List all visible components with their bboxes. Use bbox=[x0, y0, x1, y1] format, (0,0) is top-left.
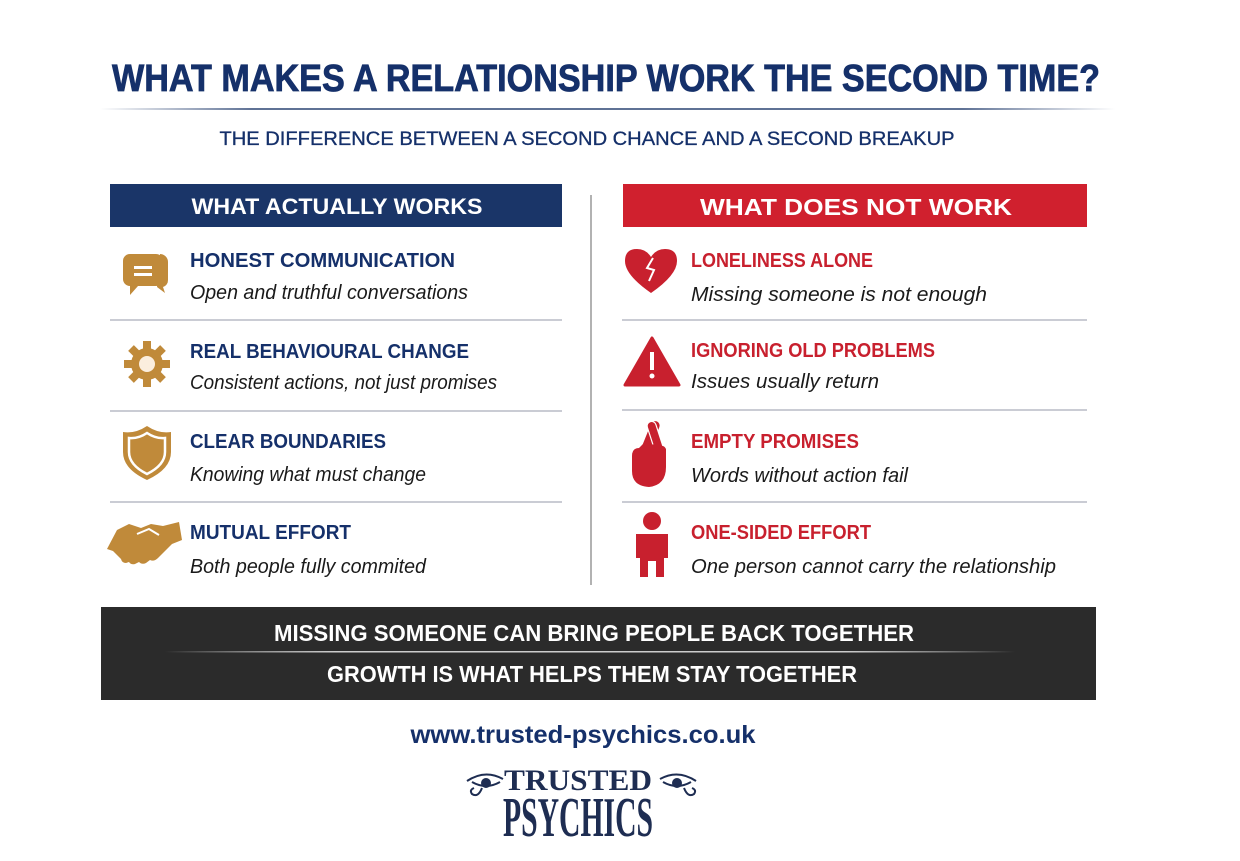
header: works bbox=[110, 184, 562, 227]
header: does not work: WHAT DOES NOT WORK bbox=[700, 194, 1012, 220]
item: behavioural change: REAL BEHAVIOURAL CHANGE bbox=[190, 341, 469, 363]
subtitle: THE DIFFERENCE BETWEEN A SECOND CHANCE AND A SECOND BREAKUP bbox=[220, 129, 954, 150]
item: boundaries: CLEAR BOUNDARIES bbox=[190, 431, 386, 453]
item: ignoring problems bbox=[691, 340, 935, 393]
item: mutual effort bbox=[190, 522, 427, 578]
item: empty promises bbox=[691, 431, 909, 487]
panel: what actually works bbox=[107, 184, 562, 578]
item: one-sided effort: ONE-SIDED EFFORT bbox=[691, 522, 871, 544]
item: one-sided effort: One person cannot carry the relationship bbox=[691, 556, 1056, 578]
title: WHAT MAKES A RELATIONSHIP WORK THE SECOND TIME? bbox=[112, 58, 1100, 100]
item: mutual effort: Both people fully commited bbox=[190, 556, 427, 578]
item: loneliness bbox=[691, 250, 987, 306]
logo: PSYCHICS bbox=[503, 787, 653, 849]
bottom banner: GROWTH IS WHAT HELPS THEM STAY TOGETHER bbox=[327, 661, 857, 687]
item: ignoring problems: Issues usually return bbox=[691, 371, 879, 393]
icon: broken heart bbox=[625, 249, 677, 293]
icon: speech bubble bbox=[123, 254, 168, 295]
item: loneliness: Missing someone is not enough bbox=[691, 284, 987, 306]
item: empty promises: Words without action fail bbox=[691, 465, 909, 487]
icon: eye right bbox=[660, 774, 696, 795]
icon: crossed fingers bbox=[632, 420, 666, 487]
item: one-sided effort bbox=[691, 522, 1056, 578]
item: behavioural change bbox=[190, 341, 497, 394]
icon: person bbox=[636, 512, 668, 577]
item: empty promises: EMPTY PROMISES bbox=[691, 431, 859, 453]
item: ignoring problems: IGNORING OLD PROBLEMS bbox=[691, 340, 935, 362]
item: behavioural change: Consistent actions, not just promises bbox=[190, 372, 497, 394]
item: honest communication: Open and truthful conversations bbox=[190, 282, 468, 304]
item: boundaries: Knowing what must change bbox=[190, 464, 426, 486]
logo: TRUSTED bbox=[504, 764, 652, 797]
icon: handshake bbox=[107, 522, 182, 564]
bottom banner: MISSING SOMEONE CAN BRING PEOPLE BACK TOGETHER bbox=[274, 620, 914, 646]
item: mutual effort: MUTUAL EFFORT bbox=[190, 522, 351, 544]
icon: shield bbox=[123, 426, 171, 480]
logo bbox=[467, 764, 696, 849]
item: honest communication bbox=[190, 250, 468, 304]
icon: gear bbox=[124, 341, 170, 387]
icon: warning bbox=[625, 338, 679, 385]
item: loneliness: LONELINESS ALONE bbox=[691, 250, 873, 272]
website url: www.trusted-psychics.co.uk bbox=[409, 721, 756, 749]
bottom banner bbox=[101, 607, 1096, 700]
header: works: WHAT ACTUALLY WORKS bbox=[192, 194, 482, 219]
item: boundaries bbox=[190, 431, 426, 486]
header: does not work bbox=[623, 184, 1087, 227]
icon: eye left bbox=[467, 774, 503, 795]
item: honest communication: HONEST COMMUNICATION bbox=[190, 250, 455, 272]
panel: what does not work bbox=[622, 184, 1087, 578]
